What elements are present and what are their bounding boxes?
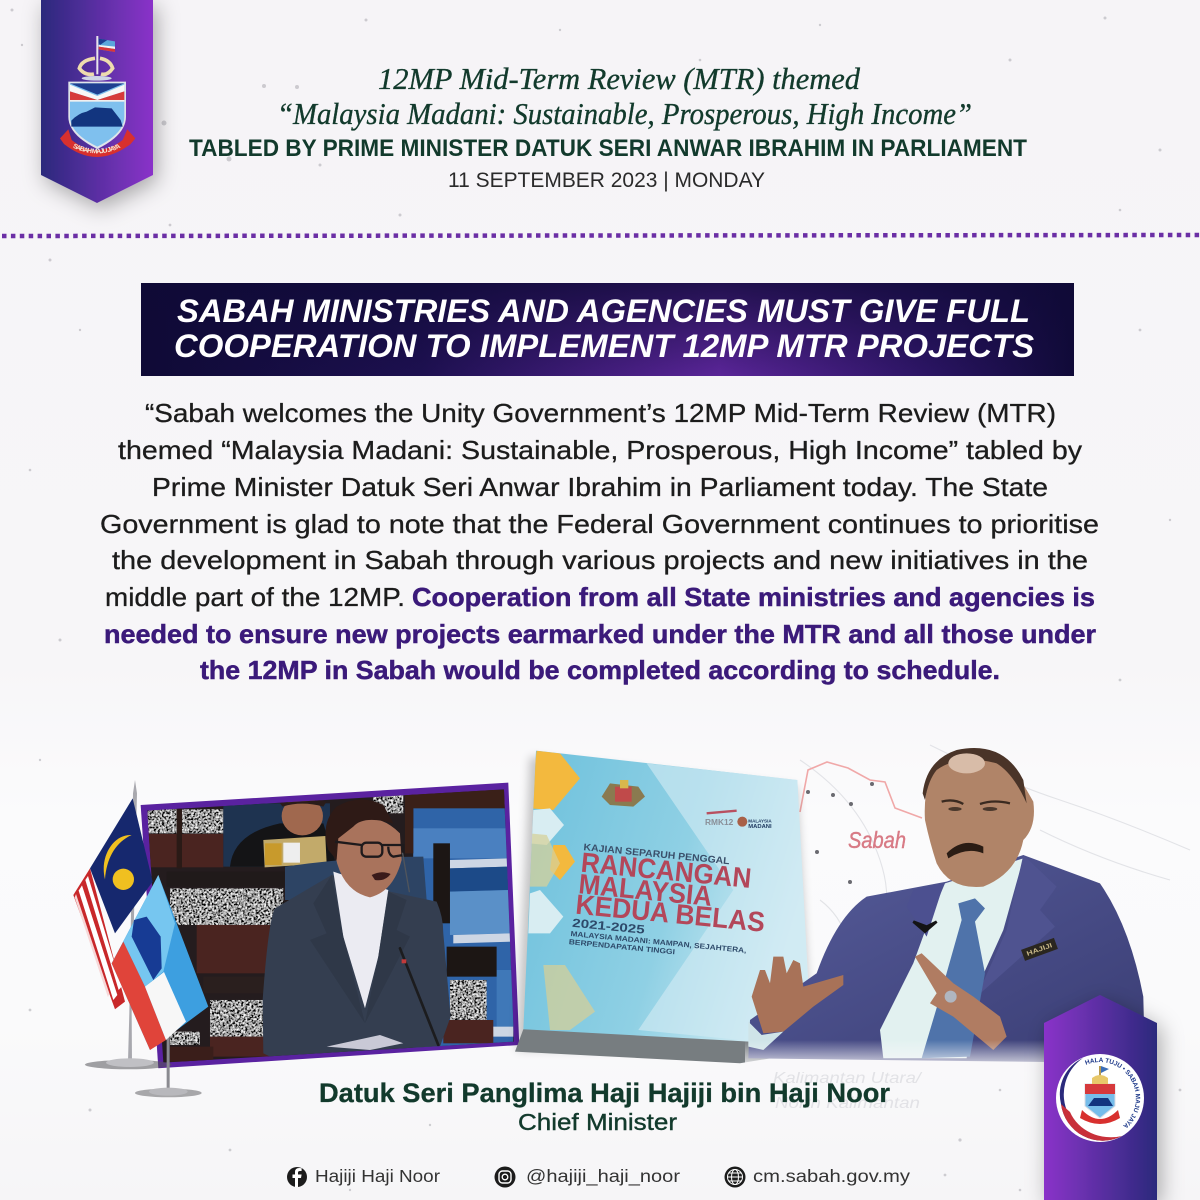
Malaysia flag [73,798,153,1009]
cover titles: KEDUA BELAS [574,889,766,938]
highlighted sentence: Cooperation from all State ministries and agencies is [412,582,1095,612]
lapel microphone [913,922,937,932]
map label Kalimantan [773,1070,923,1112]
social media footer: @hajiji_haji_noor [526,1166,680,1187]
Malaysia flag stand [85,780,172,1069]
body quote paragraph: the development in Sabah through various projects and new initiatives in the [112,545,1088,575]
cover titles: RANCANGAN [580,847,753,894]
headline banner [141,283,1074,376]
book page edges [515,1029,812,1063]
photo: Prime Minister in Parliament [141,783,520,1068]
title: script line two: “Malaysia Madani: Sustainable, Prosperous, High Income” [277,96,972,131]
body quote paragraph [100,398,1099,685]
map label Kalimantan: North Kalimantan [775,1095,920,1112]
map border line [800,762,922,818]
social media footer: Hajiji Haji Noor [315,1166,440,1186]
title: script line one: 12MP Mid-Term Review (MTR) themed [378,61,860,96]
suit [263,875,451,1058]
name badge: HAJIJI [1026,942,1053,958]
caption: role: Chief Minister [518,1109,677,1135]
cover titles: 2021-2025 [572,916,646,937]
wooden benches [167,872,400,887]
map label Kalimantan: Kalimantan Utara/ [773,1070,923,1087]
headline line two: COOPERATION TO IMPLEMENT 12MP MTR PROJECTS [174,328,1035,364]
left hand [752,957,843,1033]
icon: globe [724,1166,746,1188]
body quote paragraph: themed “Malaysia Madani: Sustainable, Prosperous, High Income” tabled by [118,435,1082,465]
fade under photos [745,1040,1050,1072]
title block [189,61,1027,192]
logos RMK12 and Malaysia Madani: MALAYSIA [748,818,772,823]
caption: Chief Minister name [319,1078,890,1135]
icon: Sabah coat of arms [60,36,136,157]
map label Sabah: Sabah [848,827,906,853]
tie [922,898,985,1058]
icon: Hala Tuju Sabah Maju Jaya badge [1056,1054,1144,1142]
top ribbon with state crest [32,0,170,218]
highlighted sentence [104,582,1096,685]
logos RMK12 and Malaysia Madani [705,811,772,830]
head [333,818,402,897]
photo: Chief Minister [748,748,1145,1063]
social media footer: cm.sabah.gov.my [753,1166,910,1186]
cover titles: MALAYSIA [577,868,714,912]
coat of arms of Malaysia [602,780,645,807]
cover titles: MALAYSIA MADANI: MAMPAN, SEJAHTERA, [570,929,747,955]
icon: Instagram [494,1166,516,1188]
icon: Hala Tuju Sabah Maju Jaya badge: HALA TUJU • SABAH MAJU JAYA [1084,1058,1140,1128]
bottom-right ribbon with badge [1035,995,1174,1200]
body quote paragraph: Government is glad to note that the Federal Government continues to prioritise [100,509,1099,539]
cuff [748,1022,783,1050]
ribbon shape [41,0,153,203]
upper speckled panels [147,793,403,833]
shirt [880,858,1023,1058]
caption: Chief Minister name: Datuk Seri Panglima Haji Hajiji bin Haji Noor [319,1078,890,1108]
subtitle: TABLED BY PRIME MINISTER DATUK SERI ANWAR IBRAHIM IN PARLIAMENT [189,135,1027,162]
body quote paragraph: “Sabah welcomes the Unity Government’s 12MP Mid-Term Review (MTR) [145,398,1056,428]
seated officer [230,797,337,867]
social media footer [287,1166,910,1188]
headline line one: SABAH MINISTRIES AND AGENCIES MUST GIVE FULL [177,293,1030,329]
highlighted sentence: needed to ensure new projects earmarked under the MTR and all those under [104,619,1096,649]
faint map of Sabah [773,745,1190,1112]
lapels [977,855,1057,997]
icon: table flags [73,780,208,1097]
logos RMK12 and Malaysia Madani: MADANI [748,824,772,830]
icon: Facebook [287,1167,307,1187]
body quote paragraph: Prime Minister Datuk Seri Anwar Ibrahim in Parliament today. The State [152,472,1048,502]
Sabah flag stand [135,1037,202,1097]
cover titles: KAJIAN SEPARUH PENGGAL [583,842,730,867]
cover [520,747,820,1047]
name badge [1021,938,1058,961]
suit [748,855,1145,1063]
logos RMK12 and Malaysia Madani: RMK12 [705,818,734,827]
highlighted sentence: the 12MP in Sabah would be completed according to schedule. [200,655,1000,685]
microphone [400,853,438,1045]
cover titles: BERPENDAPATAN TINGGI [568,937,675,956]
chair back [285,857,427,900]
date: 11 SEPTEMBER 2023 | MONDAY [448,169,765,192]
head [923,748,1034,887]
cover titles [568,842,771,965]
ribbon shape [1044,995,1157,1200]
Sabah flag [112,875,208,1050]
icon: Sabah coat of arms: SABAH MAJU JAYA [73,144,121,154]
right hand [915,953,1007,1050]
body quote paragraph: middle part of the 12MP. [105,582,405,612]
book cover: RMK12 Mid-Term Review [515,747,820,1063]
photo frame [141,783,519,1068]
